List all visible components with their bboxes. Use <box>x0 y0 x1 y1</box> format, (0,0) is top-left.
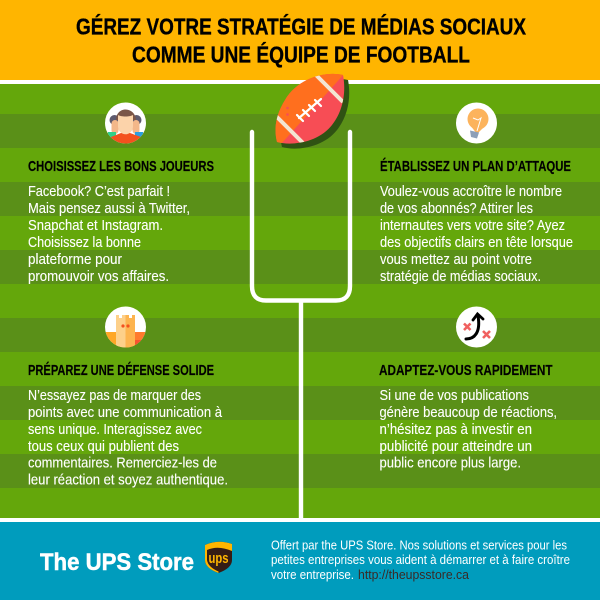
heading: ADAPTEZ-VOUS RAPIDEMENT <box>379 362 552 379</box>
icon: football <box>276 74 350 149</box>
body text: Voulez-vous accroître le nombre <box>380 184 562 200</box>
body text <box>28 388 228 488</box>
body text: Si une de vos publications <box>380 388 529 404</box>
sponsor text <box>271 538 570 582</box>
body text: des objectifs clairs en tête lorsque <box>380 235 573 251</box>
body text: génère beaucoup de réactions, <box>380 405 557 421</box>
body text: public encore plus large. <box>380 456 521 472</box>
body text: tous ceux qui publient des <box>28 439 179 455</box>
body text: Snapchat et Instagram. <box>28 218 163 234</box>
body text: Choisissez la bonne <box>28 235 141 251</box>
panel: établissez un plan d'attaque <box>380 102 573 285</box>
body text <box>28 184 190 285</box>
title <box>76 12 527 68</box>
body text: Facebook? C’est parfait ! <box>28 184 170 200</box>
football field background <box>0 80 600 518</box>
icon: play diagram <box>456 306 497 348</box>
body text: de vos abonnés? Attirer les <box>380 201 533 217</box>
footer <box>0 518 600 600</box>
icon: light bulb <box>456 102 497 144</box>
heading: PRÉPAREZ UNE DÉFENSE SOLIDE <box>28 362 214 379</box>
body text: leur réaction et soyez authentique. <box>28 472 228 488</box>
icon: players <box>105 102 146 146</box>
body text: internautes vers votre site? Ayez <box>380 218 565 234</box>
body text: plateforme pour <box>28 252 122 268</box>
sponsor text: petites entreprises vous aident à démarrer et à faire croître <box>271 553 570 567</box>
sponsor text: http://theupsstore.ca <box>358 568 469 582</box>
panel: choisissez les bons joueurs <box>28 102 214 285</box>
sponsor text: Offert par the UPS Store. Nos solutions et services pour les <box>271 538 567 552</box>
body text: commentaires. Remerciez-les de <box>28 456 217 472</box>
panel: adaptez-vous rapidement <box>379 306 557 472</box>
title banner <box>0 0 600 80</box>
brand name: The UPS Store <box>40 549 194 576</box>
body text: Mais pensez aussi à Twitter, <box>28 201 190 217</box>
title: COMME UNE ÉQUIPE DE FOOTBALL <box>132 40 470 68</box>
body text <box>380 388 557 472</box>
body text: N’essayez pas de marquer des <box>28 388 201 404</box>
body text <box>380 184 573 285</box>
body text: n’hésitez pas à investir en <box>380 422 532 438</box>
heading: CHOISISSEZ LES BONS JOUEURS <box>28 158 214 175</box>
body text: promouvoir vos affaires. <box>28 269 169 285</box>
body text: sens unique. Interagissez avec <box>28 422 202 438</box>
sponsor text: votre entreprise. <box>271 568 354 582</box>
body text: vous mettez au point votre <box>380 252 532 268</box>
body text: publicité pour atteindre un <box>380 439 532 455</box>
icon: castle tower <box>105 306 146 348</box>
body text: points avec une communication à <box>28 405 223 421</box>
icon: UPS shield logo: ups <box>208 550 228 567</box>
goal post <box>252 132 350 518</box>
icon: UPS shield logo <box>205 542 232 573</box>
panel: préparez une défense solide <box>28 306 228 488</box>
body text: stratégie de médias sociaux. <box>380 269 541 285</box>
